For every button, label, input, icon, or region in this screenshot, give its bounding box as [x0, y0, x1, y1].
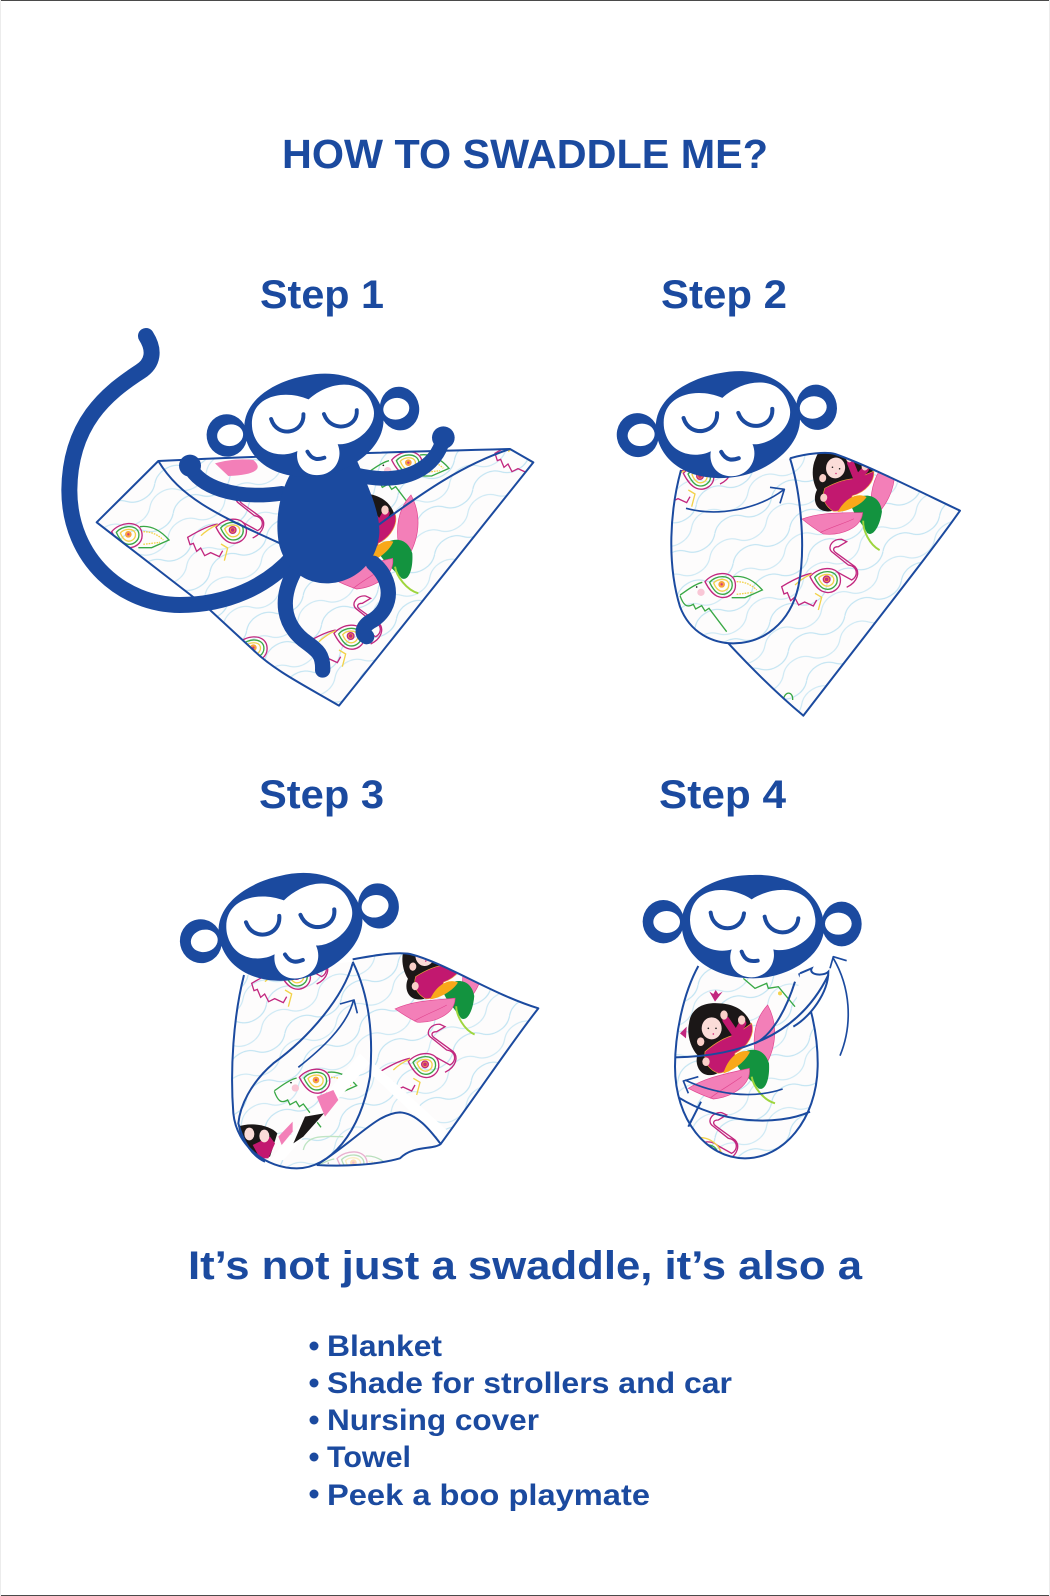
swaddle cloth spread flat [96, 448, 534, 707]
subheading: It’s not just a swaddle, it’s also a [188, 1244, 863, 1288]
heading: step 3: Step 3 [259, 773, 384, 817]
heading: step 1: Step 1 [260, 273, 384, 317]
illustration: step 2 one side wrapped [609, 355, 960, 716]
monkey head [199, 358, 428, 494]
heading: step 4: Step 4 [659, 773, 787, 817]
arrow up [830, 957, 848, 1056]
monkey body and limbs [179, 426, 455, 670]
heading: step 2: Step 2 [661, 273, 787, 317]
monkey head [171, 853, 410, 1002]
arrow [298, 1000, 357, 1067]
swaddle cloth back [316, 952, 540, 1167]
monkey head [609, 355, 846, 495]
wrapped front panel [232, 936, 371, 1168]
arrow left [683, 1077, 783, 1095]
item: towel: Towel [327, 1441, 411, 1474]
title: HOW TO SWADDLE ME? [282, 131, 768, 177]
item: blanket: Blanket [327, 1330, 442, 1363]
wrap folds [675, 968, 828, 1127]
item: shade: Shade for strollers and car [327, 1367, 732, 1400]
item: nursing cover: Nursing cover [327, 1404, 539, 1437]
list of other uses [310, 1330, 732, 1512]
arrow [686, 487, 784, 512]
illustration: step 4 fully swaddled [643, 875, 862, 1183]
swaddled body [674, 966, 819, 1160]
illustration: step 3 bottom folded up [180, 872, 540, 1170]
item: peek a boo: Peek a boo playmate [327, 1479, 650, 1512]
illustration: step 1 monkey lying on swaddle [69, 336, 571, 706]
monkey tail [69, 336, 293, 605]
monkey head [643, 875, 862, 978]
wrapped front panel [670, 458, 804, 644]
swaddle cloth back [728, 428, 960, 716]
